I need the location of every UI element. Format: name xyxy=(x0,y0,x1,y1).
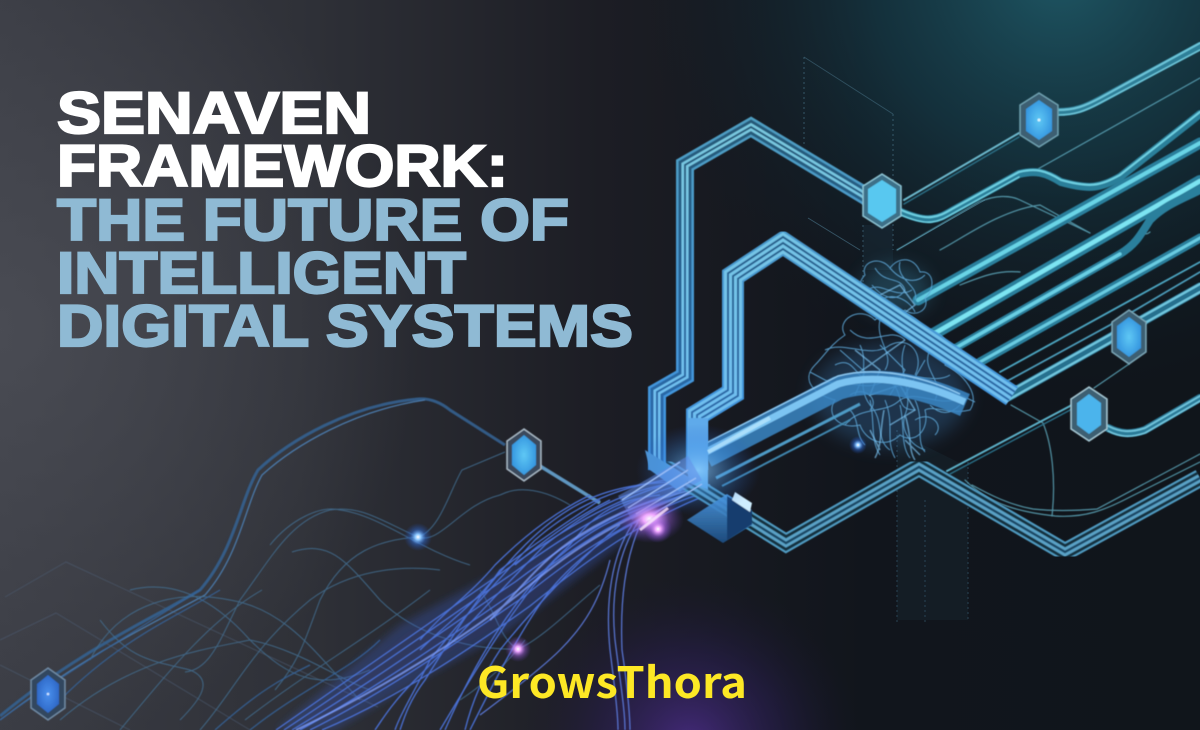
inner frame tube xyxy=(697,243,1012,470)
hex 4 branches xyxy=(947,396,1200,474)
glow: small blue spark in knot xyxy=(849,436,867,454)
hex node: top right xyxy=(1020,93,1058,147)
middle hex branch xyxy=(901,112,1200,222)
bundle entry rails into junction xyxy=(622,418,770,520)
junction block xyxy=(645,418,752,543)
title: THE FUTURE OF xyxy=(57,188,569,253)
glow: purple stars at junction xyxy=(616,495,684,543)
lower-left network web xyxy=(0,399,600,730)
lower network lines xyxy=(0,590,380,730)
title: FRAMEWORK: xyxy=(57,134,508,199)
junction glow xyxy=(636,424,760,516)
thin lines xyxy=(897,78,1200,516)
hex node: lower centre xyxy=(507,429,541,481)
thin curves xyxy=(60,452,600,730)
title: INTELLIGENT xyxy=(57,241,466,306)
lower right rails behind hex xyxy=(1000,272,1200,400)
hex node: centre xyxy=(863,174,901,228)
thick bright rails xyxy=(918,143,1200,372)
top-right branch xyxy=(1058,43,1200,115)
title: SENAVEN xyxy=(57,81,371,146)
right-side cyan circuit lines xyxy=(897,43,1200,516)
brand wordmark: GrowsThora xyxy=(477,649,747,711)
fiber bundle from junction to bottom edge xyxy=(276,468,710,730)
hex node: bottom left xyxy=(31,668,65,720)
faint grid lines xyxy=(0,562,378,730)
title xyxy=(57,81,633,359)
knot glow xyxy=(812,343,968,447)
hex node: lower right xyxy=(1071,387,1107,441)
title: DIGITAL SYSTEMS xyxy=(57,294,633,359)
knot of tangled filaments xyxy=(809,260,975,460)
hex node: right xyxy=(1112,310,1146,364)
upper frame tube xyxy=(657,127,869,470)
faint dotted construction panels xyxy=(804,57,985,625)
glow: pink star xyxy=(505,636,531,662)
lower tube xyxy=(662,466,1200,552)
hex-to-hex connector xyxy=(904,133,1019,200)
main upper strand to hex node xyxy=(0,399,600,720)
glow: blue star xyxy=(404,523,432,551)
curved glowing beam through the knot xyxy=(706,372,965,486)
